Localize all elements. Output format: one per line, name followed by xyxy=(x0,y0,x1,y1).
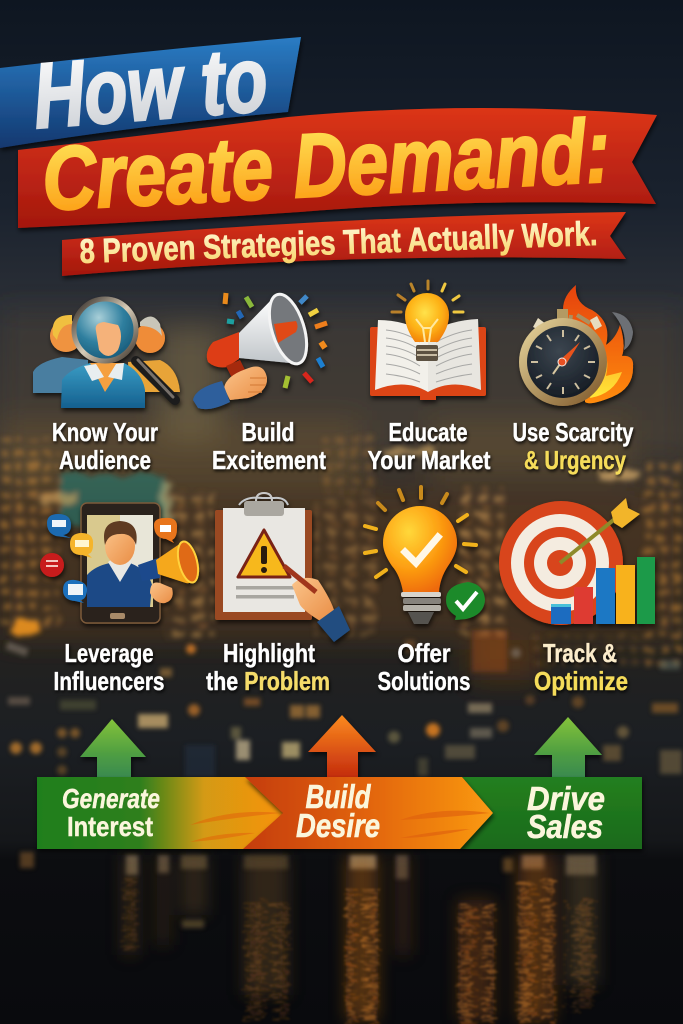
icon: target, arrow and bar chart xyxy=(499,498,655,625)
label: Influencers xyxy=(54,666,164,696)
title banner xyxy=(0,28,657,276)
stage: generate interest: Generate xyxy=(62,783,160,814)
label: Optimize xyxy=(534,666,628,696)
label: the Problem xyxy=(206,666,330,696)
label: Offer xyxy=(398,638,450,668)
label: Excitement xyxy=(212,445,326,475)
blue ribbon: How to: How to xyxy=(30,28,271,148)
label: Audience xyxy=(59,445,151,475)
strategy: know your audience xyxy=(33,299,180,475)
label: Know Your xyxy=(52,417,158,447)
strategy: highlight the problem xyxy=(206,493,350,696)
label: Your Market xyxy=(368,445,491,475)
funnel band xyxy=(37,777,642,849)
label xyxy=(206,638,330,696)
label: Track & xyxy=(543,638,617,668)
stage: generate interest: Interest xyxy=(67,811,153,842)
label xyxy=(378,638,470,696)
label: Solutions xyxy=(378,666,470,696)
label xyxy=(52,417,158,475)
stage: build desire: Desire xyxy=(296,807,380,844)
icon: megaphone with hand xyxy=(193,290,327,409)
label xyxy=(368,417,491,475)
icon: audience under magnifier xyxy=(33,299,180,408)
icon: stopwatch on fire xyxy=(519,285,633,406)
stage: generate interest xyxy=(37,777,283,849)
icon: open book and light bulb xyxy=(370,281,486,400)
arrow: up green xyxy=(80,719,146,777)
strategy: use scarcity and urgency xyxy=(512,285,634,475)
label: Educate xyxy=(388,417,468,447)
arrow: up orange xyxy=(308,715,376,777)
arrow: up green right xyxy=(534,717,602,777)
stage: build desire: Build xyxy=(306,778,371,815)
strategy: educate your market xyxy=(368,281,491,475)
label: Build xyxy=(242,417,294,447)
stage: drive sales: Drive xyxy=(527,780,605,817)
label: Highlight xyxy=(223,638,315,668)
water reflections xyxy=(123,855,598,1020)
label xyxy=(512,417,634,475)
icon: tablet influencer with megaphone xyxy=(40,503,202,623)
strategy: leverage influencers xyxy=(40,503,202,696)
strategy: offer solutions xyxy=(365,487,485,696)
label: & Urgency xyxy=(524,445,626,475)
stage: drive sales xyxy=(458,777,642,849)
label xyxy=(534,638,628,696)
icon: clipboard warning xyxy=(215,493,350,642)
label xyxy=(54,638,164,696)
stage: build desire xyxy=(243,777,493,849)
label: Leverage xyxy=(64,638,154,668)
label: Use Scarcity xyxy=(512,417,634,447)
stage: drive sales: Sales xyxy=(527,808,603,845)
strategy: track and optimize xyxy=(499,498,655,696)
label xyxy=(212,417,326,475)
strategy: build excitement xyxy=(193,290,327,475)
icon: light bulb with check xyxy=(365,487,485,624)
